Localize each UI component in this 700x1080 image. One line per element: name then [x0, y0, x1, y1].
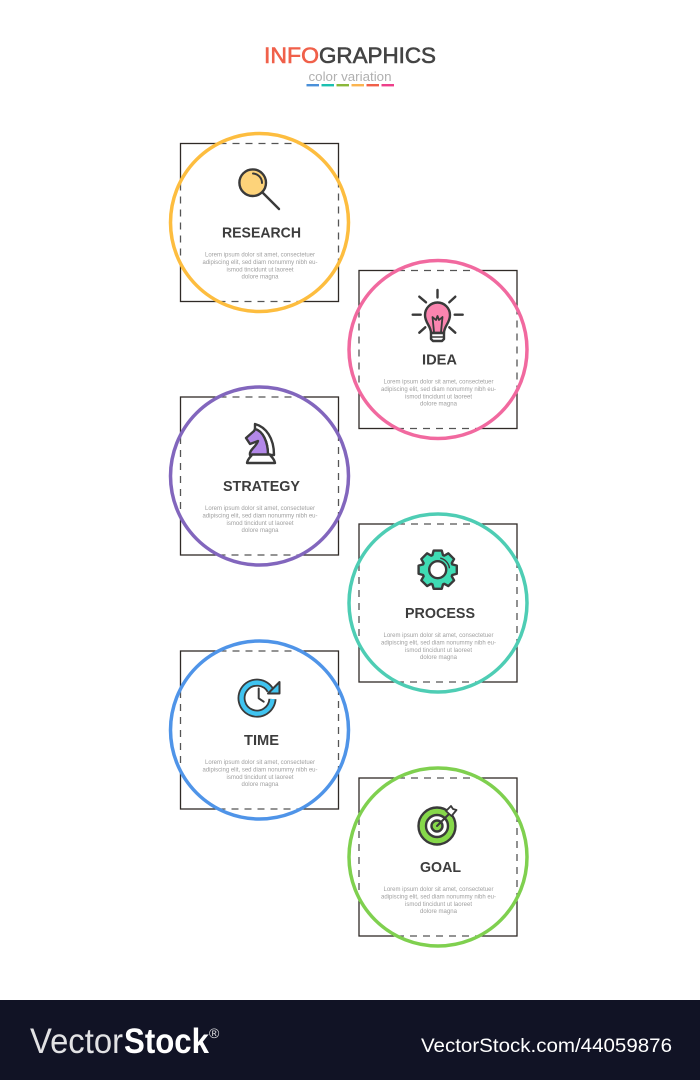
- icon: light bulb: [413, 290, 463, 341]
- text: idea: adipiscing elit, sed diam nonummy nibh eu-: [381, 386, 496, 393]
- text: idea: ismod tincidunt ut laoreet: [405, 394, 472, 400]
- text: time: adipiscing elit, sed diam nonummy nibh eu-: [202, 766, 318, 774]
- text: strategy: adipiscing elit, sed diam nonummy nibh eu-: [202, 512, 318, 520]
- panel: strategy: [170, 387, 348, 565]
- text: goal: dolore magna: [420, 908, 457, 915]
- heading: process: PROCESS: [405, 605, 475, 622]
- text: idea: dolore magna: [420, 400, 457, 408]
- text: research: dolore magna: [242, 274, 279, 280]
- footer bar: [0, 1000, 700, 1080]
- text: research: Lorem ipsum dolor sit amet, consectetuer: [205, 252, 316, 258]
- icon: target: [418, 806, 456, 844]
- heading: time: TIME: [244, 732, 279, 749]
- text: goal: Lorem ipsum dolor sit amet, consectetuer: [384, 886, 494, 893]
- text: research: ismod tincidunt ut laoreet: [226, 266, 294, 274]
- header: [264, 43, 436, 86]
- text: time: dolore magna: [242, 781, 279, 788]
- text: goal: ismod tincidunt ut laoreet: [405, 901, 472, 908]
- panel: process: [349, 514, 527, 692]
- footer url: VectorStock.com/44059876: [421, 1036, 672, 1057]
- heading: idea: IDEA: [422, 352, 457, 368]
- heading: strategy: STRATEGY: [223, 478, 300, 495]
- heading: research: RESEARCH: [222, 224, 301, 242]
- panel: idea: [349, 260, 527, 438]
- text: research: [202, 252, 318, 280]
- text: process: [381, 632, 496, 661]
- text: strategy: dolore magna: [242, 527, 279, 534]
- panel: time: [170, 641, 348, 819]
- text: process: ismod tincidunt ut laoreet: [405, 647, 472, 654]
- text: goal: [381, 886, 496, 915]
- icon: gear: [419, 551, 457, 589]
- text: time: Lorem ipsum dolor sit amet, consectetuer: [205, 759, 316, 766]
- text: strategy: Lorem ipsum dolor sit amet, consectetuer: [205, 505, 316, 512]
- icon: chess knight: [246, 424, 275, 463]
- panel: research: [170, 134, 348, 312]
- title: INFO: [264, 43, 319, 68]
- text: strategy: [202, 505, 318, 534]
- registered mark: ®: [209, 1025, 220, 1041]
- text: process: adipiscing elit, sed diam nonummy nibh eu-: [381, 640, 496, 646]
- text: idea: Lorem ipsum dolor sit amet, consectetuer: [384, 378, 494, 386]
- colour bars: [306, 84, 394, 86]
- text: idea: [381, 378, 496, 408]
- text: process: Lorem ipsum dolor sit amet, consectetuer: [384, 632, 494, 639]
- text: goal: adipiscing elit, sed diam nonummy nibh eu-: [381, 894, 496, 900]
- text: strategy: ismod tincidunt ut laoreet: [226, 520, 294, 527]
- icon: magnifying glass: [239, 169, 279, 209]
- icon: clock with arrow: [242, 682, 280, 714]
- text: time: [202, 759, 318, 788]
- text: time: ismod tincidunt ut laoreet: [226, 774, 294, 781]
- text: process: dolore magna: [420, 654, 457, 661]
- panel: goal: [349, 768, 527, 946]
- heading: goal: GOAL: [420, 859, 461, 876]
- footer logo: Vector: [30, 1022, 123, 1061]
- title: GRAPHICS: [319, 43, 436, 68]
- subtitle: color variation: [308, 70, 392, 84]
- footer logo: Stock: [124, 1022, 209, 1061]
- text: research: adipiscing elit, sed diam nonummy nibh eu-: [202, 259, 318, 266]
